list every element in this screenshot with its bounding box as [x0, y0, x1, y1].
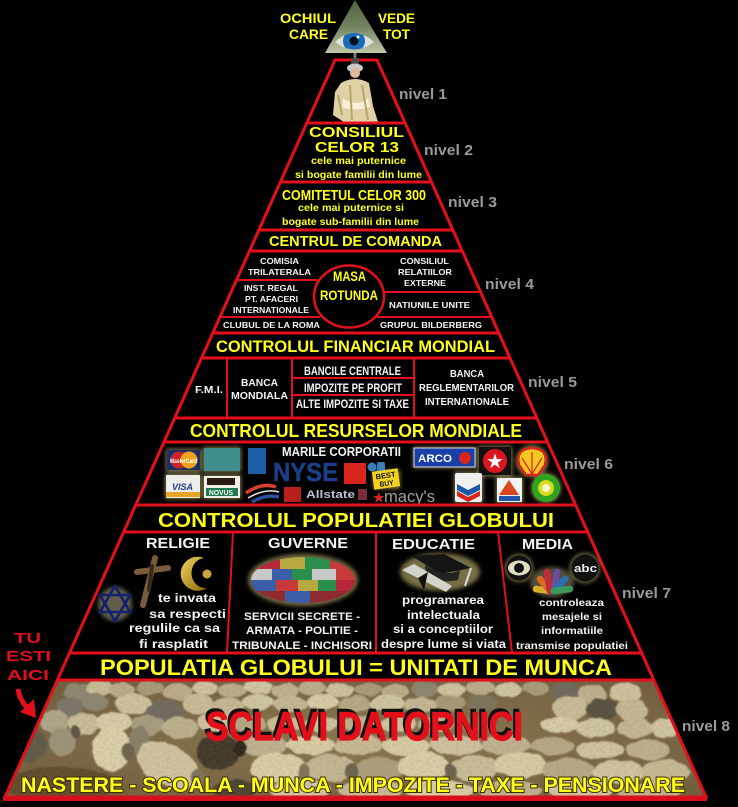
comisia trilaterala: [248, 256, 311, 277]
description line 2: si bogate familii din lume: [295, 169, 422, 181]
nivel 1: queen: [333, 58, 447, 122]
comisia trilaterala: COMISIA: [260, 256, 299, 266]
logo: nyse: NYSE: [273, 457, 338, 487]
column: guverne: [232, 535, 372, 652]
column: educatie: EDUCATIE: [392, 536, 475, 553]
label: nivel 1: nivel 1: [399, 86, 447, 103]
logo: macys: macy's: [384, 487, 435, 506]
logo: shell: [518, 448, 546, 475]
text: informatiile: [541, 625, 603, 637]
text: [381, 595, 507, 651]
natiunile unite: NATIUNILE UNITE: [389, 300, 470, 310]
logo glow: [165, 445, 561, 503]
logo: bank of america: [246, 485, 279, 502]
column: media: [505, 536, 628, 652]
consiliul relatiilor externe: [398, 256, 452, 288]
text: transmise populatiei: [516, 640, 628, 652]
consiliul relatiilor externe: EXTERNE: [404, 278, 446, 288]
life cycle caption: NASTERE - SCOALA - MUNCA - IMPOZITE - TAXE - PENSIONARE: [21, 774, 685, 797]
round table circle: MASA: [333, 268, 366, 284]
callout: tu esti aici: TU: [14, 630, 41, 647]
text: [232, 611, 372, 652]
logo: blue cross shield: [368, 462, 385, 472]
icon: crescent and star: [181, 557, 212, 591]
banca mondiala: BANCA: [241, 378, 278, 389]
description line 2: bogate sub-familii din lume: [282, 216, 419, 228]
description: cele mai puternice: [311, 155, 406, 167]
description: cele mai puternice si: [298, 202, 404, 214]
consiliul relatiilor externe: CONSILIUL: [400, 256, 449, 266]
inst. regal: [233, 283, 309, 315]
logo: macys: ★: [373, 490, 385, 505]
text: sa respecti: [149, 609, 226, 621]
band: controlul resurselor mondiale: CONTROLUL RESURSELOR MONDIALE: [190, 421, 522, 441]
eye of providence with caption: [280, 0, 415, 60]
text: si a conceptiilor: [393, 624, 494, 636]
logo: best buy: BEST: [375, 470, 396, 481]
text: controleaza: [539, 597, 604, 609]
caption right: [378, 10, 415, 42]
text: TRIBUNALE - INCHISORI: [232, 640, 372, 652]
comisia trilaterala: TRILATERALA: [248, 267, 311, 277]
panel: base sheep photo: [7, 682, 704, 796]
text: intelectuala: [407, 610, 481, 622]
logo: texaco: ★: [486, 449, 504, 473]
caption right: TOT: [383, 26, 410, 42]
logo: bp: [532, 474, 560, 502]
band: centrul de comanda: CENTRUL DE COMANDA: [269, 233, 442, 250]
banca reglementarilor: BANCA: [450, 369, 484, 380]
band: controlul financiar mondial: CONTROLUL FINANCIAR MONDIAL: [216, 338, 495, 356]
heading: COMITETUL CELOR 300: [282, 188, 426, 204]
nivel 2: consiliul celor 13: [295, 123, 473, 181]
f.m.i.: F.M.I.: [195, 385, 223, 396]
column: religie: RELIGIE: [146, 535, 210, 552]
column: guverne: GUVERNE: [268, 535, 348, 552]
text: ARMATA - POLITIE -: [246, 625, 358, 637]
banca reglementarilor: REGLEMENTARILOR: [419, 383, 515, 394]
banca mondiala: [231, 378, 288, 402]
arrow: [18, 689, 36, 718]
label: nivel 5: nivel 5: [528, 374, 577, 391]
callout: tu esti aici: [6, 630, 51, 718]
logo: chevron: [455, 473, 482, 502]
banca reglementarilor: INTERNATIONALE: [425, 397, 509, 408]
text: regulile ca sa: [129, 623, 221, 635]
icon: flag globe: [248, 554, 358, 606]
heading: SCLAVI DATORNICI: [206, 705, 523, 749]
icon: star of david: [98, 586, 132, 621]
label: nivel 7: nivel 7: [622, 585, 671, 602]
callout: tu esti aici: AICI: [7, 667, 49, 684]
nivel 8: sclavi datornici: [21, 702, 730, 797]
column: media: MEDIA: [522, 536, 573, 553]
text: [516, 597, 628, 652]
logo: mastercard: MasterCard: [170, 459, 197, 465]
label: nivel 3: nivel 3: [448, 194, 497, 211]
logo: blue book: [248, 448, 266, 474]
callout: tu esti aici: ESTI: [6, 648, 51, 665]
logo: allstate: Allstate: [306, 489, 355, 501]
label: nivel 8: nivel 8: [682, 718, 730, 735]
inst. regal: INST. REGAL: [244, 283, 298, 293]
icon: graduation cap and diploma: [400, 553, 480, 592]
text: [129, 593, 226, 651]
banca mondiala: MONDIALA: [231, 391, 288, 402]
inst. regal: INTERNATIONALE: [233, 305, 309, 315]
nivel 4: masa rotunda: [220, 256, 535, 330]
logo: discover novus: NOVUS: [209, 490, 233, 497]
bancile centrale: BANCILE CENTRALE: [304, 366, 401, 378]
icon: pyramid with eye: [325, 0, 387, 60]
consiliul relatiilor externe: RELATIILOR: [398, 267, 452, 277]
logo: citgo: [497, 478, 522, 502]
icon: cbs eye: [505, 554, 533, 582]
text: fi rasplatit: [139, 639, 208, 651]
round table circle: ROTUNDA: [320, 287, 378, 303]
logo: discover novus: [204, 476, 240, 498]
logo: arco: ARCO: [418, 453, 452, 465]
grupul bilderberg: GRUPUL BILDERBERG: [380, 320, 482, 330]
text: programarea: [402, 595, 485, 607]
caption left: OCHIUL: [280, 10, 336, 26]
column: educatie: [381, 536, 507, 651]
logo: small mark: [358, 489, 367, 500]
logo: texaco: [479, 447, 511, 475]
heading line 2: CELOR 13: [315, 140, 399, 156]
icon: nbc peacock: [530, 567, 574, 597]
round table circle: [314, 266, 384, 328]
band: controlul populatiei globului: CONTROLUL POPULATIEI GLOBULUI: [158, 510, 554, 532]
caption left: [280, 10, 336, 42]
alte impozite si taxe: ALTE IMPOZITE SI TAXE: [296, 399, 409, 411]
logo: green card: [204, 448, 240, 471]
logo: best buy: [372, 468, 400, 490]
heading shadow: SCLAVI DATORNICI: [204, 702, 521, 746]
logo: arco: [414, 448, 475, 467]
logo: red square: [344, 463, 366, 484]
nivel 5: institutii financiare: [195, 358, 577, 418]
logo: visa: VISA: [172, 482, 193, 492]
caption left: CARE: [289, 26, 328, 42]
label: nivel 2: nivel 2: [424, 142, 473, 159]
label: nivel 6: nivel 6: [564, 456, 613, 473]
logo: visa: [166, 475, 200, 498]
heading: MARILE CORPORATII: [282, 444, 401, 459]
inst. regal: PT. AFACERI: [245, 294, 298, 304]
label: nivel 4: nivel 4: [485, 276, 535, 293]
text: te invata: [158, 593, 217, 605]
band: populatia globului: POPULATIA GLOBULUI = UNITATI DE MUNCA: [100, 655, 612, 680]
impozite pe profit: IMPOZITE PE PROFIT: [304, 383, 402, 395]
nivel 6: marile corporatii: [165, 444, 613, 506]
text: despre lume si viata: [381, 639, 507, 651]
logo: wells fargo: [284, 487, 301, 502]
logo: mastercard: [167, 450, 200, 470]
nivel 3: comitetul celor 300: [280, 182, 497, 228]
text: SERVICII SECRETE -: [244, 611, 360, 623]
icon: seated queen figure: [333, 58, 378, 122]
icon: crucifix: [137, 558, 168, 605]
logo: best buy: BUY: [379, 478, 394, 489]
caption right: VEDE: [378, 10, 415, 26]
column: religie: [98, 535, 226, 651]
nivel 7: religie guverne educatie media: [98, 532, 671, 653]
icon: abc: abc: [574, 563, 597, 575]
text: mesajele si: [542, 611, 602, 623]
clubul de la roma: CLUBUL DE LA ROMA: [223, 320, 320, 330]
base shadow edge: [3, 796, 707, 801]
banca reglementarilor: [419, 369, 515, 408]
heading: CONSILIUL: [309, 125, 404, 141]
